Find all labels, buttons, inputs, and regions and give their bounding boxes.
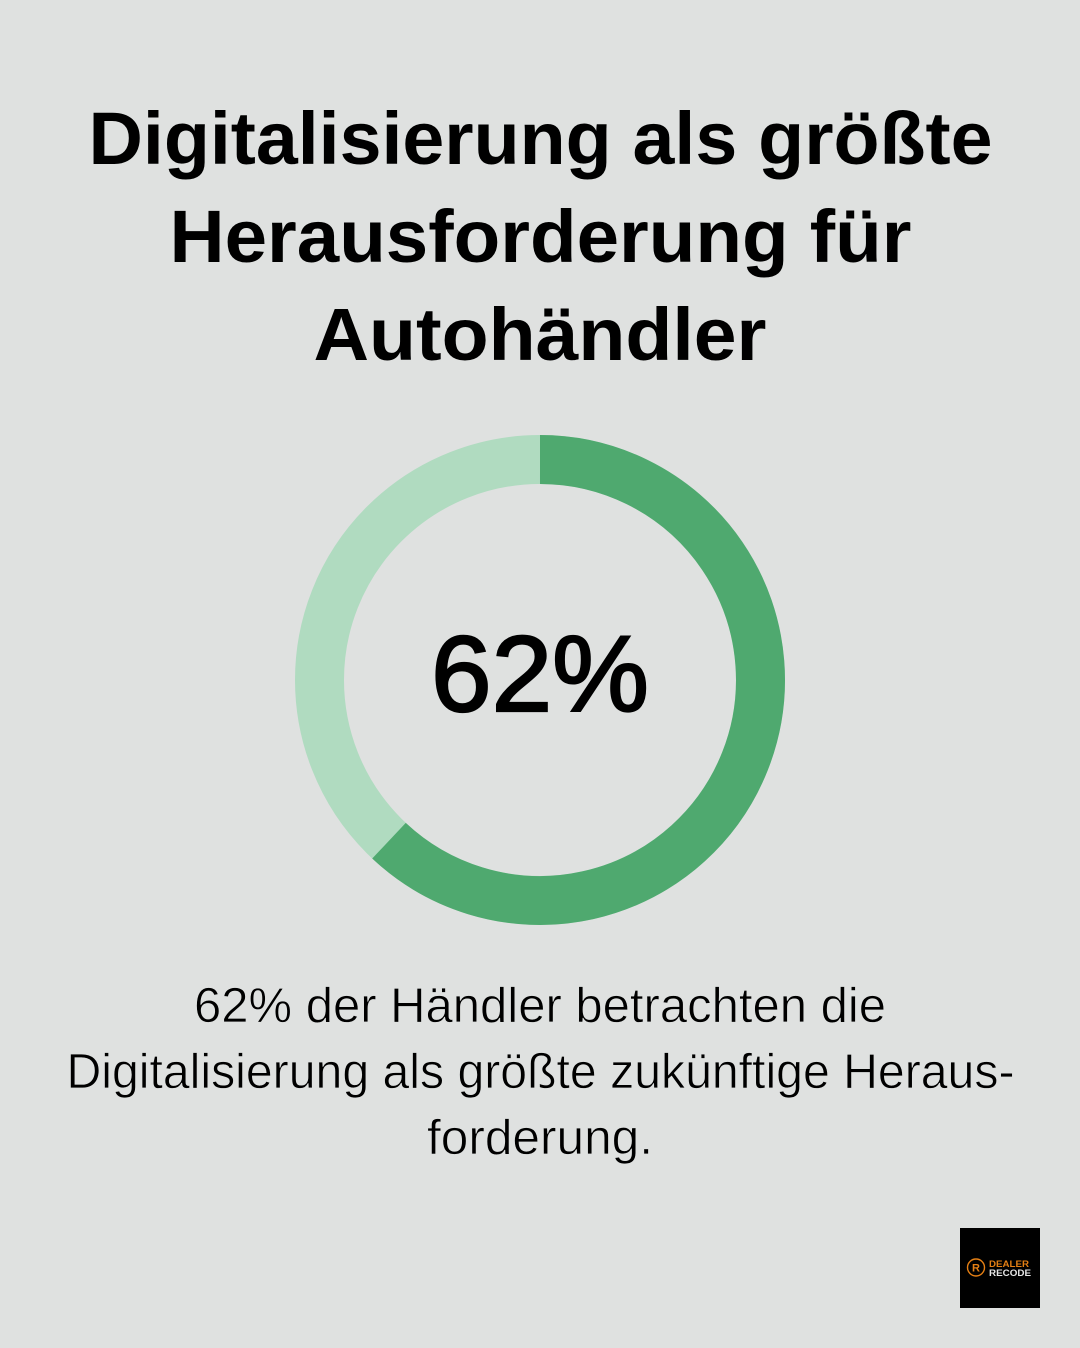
title: Digitalisierung als größte	[88, 97, 992, 180]
donut value: 62%	[431, 613, 649, 734]
title: Herausforderung für	[170, 195, 912, 278]
description text: 62% der Händler betrachten die	[194, 979, 886, 1033]
description text	[66, 979, 1014, 1165]
logo wordmark	[989, 1259, 1031, 1278]
description text: forderung.	[427, 1111, 653, 1165]
donut chart: 62 percent	[320, 460, 760, 900]
title: Autohändler	[314, 293, 766, 376]
title	[88, 97, 992, 376]
description text: Digitalisierung als größte zukünftige Heraus-	[66, 1045, 1014, 1099]
logo: Dealer Recode	[960, 1228, 1040, 1308]
logo wordmark: DEALER	[989, 1259, 1030, 1269]
icon: logo ring: R	[972, 1262, 980, 1274]
logo wordmark: RECODE	[989, 1268, 1031, 1278]
